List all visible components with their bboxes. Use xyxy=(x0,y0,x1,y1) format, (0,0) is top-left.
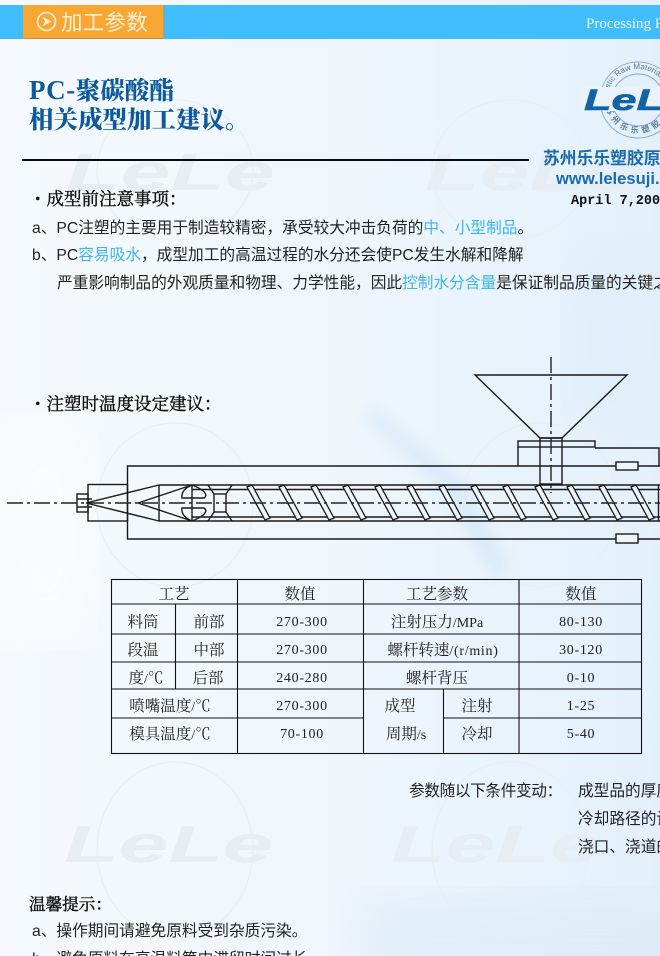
table text: 注射压力/MPa xyxy=(391,613,484,631)
screw flights xyxy=(247,485,654,520)
table text: 前部 xyxy=(193,613,225,631)
table text xyxy=(127,585,603,743)
table text: 冷却 xyxy=(461,725,493,743)
center lines xyxy=(7,357,660,503)
table text: 工艺参数 xyxy=(406,585,468,603)
tip a: a、操作期间请避免原料受到杂质污染。 xyxy=(32,923,307,940)
note a: a、PC注塑的主要用于制造较精密，承受较大冲击负荷的中、小型制品。 xyxy=(32,220,533,237)
table text: 度/℃ xyxy=(129,669,163,687)
table text: 螺杆转速/(r/min) xyxy=(387,641,499,659)
table text: 注射 xyxy=(461,697,493,715)
section: before molding xyxy=(29,189,660,292)
table text: 周期/s xyxy=(386,725,426,743)
note b: b、PC容易吸水，成型加工的高温过程的水分还会使PC发生水解和降解 xyxy=(32,247,524,264)
parameter variation note xyxy=(409,782,660,856)
table text: 工艺 xyxy=(158,585,190,603)
injection barrel diagram xyxy=(7,357,660,544)
header bar xyxy=(0,5,660,39)
background: LeLe xyxy=(425,143,634,201)
table text: 1-25 xyxy=(567,699,595,714)
screw tip xyxy=(138,485,232,521)
table text: 270-300 xyxy=(276,615,328,630)
table text: 后部 xyxy=(192,669,224,687)
table text: 270-300 xyxy=(276,699,328,714)
barrel body xyxy=(77,466,660,539)
heading: temperature settings: ・注塑时温度设定建议： xyxy=(29,394,222,414)
table text: 240-280 xyxy=(276,671,328,686)
hopper xyxy=(475,375,659,543)
title: 相关成型加工建议。 xyxy=(29,107,250,134)
table text: 段温 xyxy=(127,641,159,659)
company logo block xyxy=(543,62,660,209)
section tab: processing parameters xyxy=(23,5,164,39)
table text: 数值 xyxy=(284,585,316,603)
table text: 料筒 xyxy=(127,613,159,631)
tips heading: 温馨提示： xyxy=(29,895,112,914)
table text: 成型 xyxy=(384,697,416,715)
title xyxy=(29,75,250,134)
table text: 螺杆背压 xyxy=(406,669,468,687)
table text: 80-130 xyxy=(559,615,603,630)
condition list xyxy=(578,782,660,856)
title: PC-聚碳酸酯 xyxy=(29,75,174,105)
table text: 喷嘴温度/℃ xyxy=(129,697,211,715)
background: LeLe xyxy=(66,143,275,201)
table grid xyxy=(111,579,642,754)
table text: 70-100 xyxy=(280,727,324,742)
tips section xyxy=(29,895,323,956)
table text: 270-300 xyxy=(276,643,328,658)
logo emblem xyxy=(584,62,660,138)
table text: 模具温度/℃ xyxy=(129,724,211,743)
table text: 5-40 xyxy=(567,727,595,742)
tab label: 加工参数 xyxy=(61,11,148,35)
note label: 参数随以下条件变动： xyxy=(409,783,562,800)
table text: 中部 xyxy=(193,641,225,659)
background: LeLe xyxy=(391,815,600,873)
table text: 0-10 xyxy=(567,671,595,686)
table text: 30-120 xyxy=(559,643,603,658)
background: LeLe xyxy=(64,815,273,873)
heading: notes before molding: ・成型前注意事项： xyxy=(29,189,186,209)
table text: 数值 xyxy=(565,585,597,603)
divider line xyxy=(22,159,529,161)
icon: arrow circle xyxy=(36,12,56,32)
process parameter table xyxy=(110,578,642,754)
